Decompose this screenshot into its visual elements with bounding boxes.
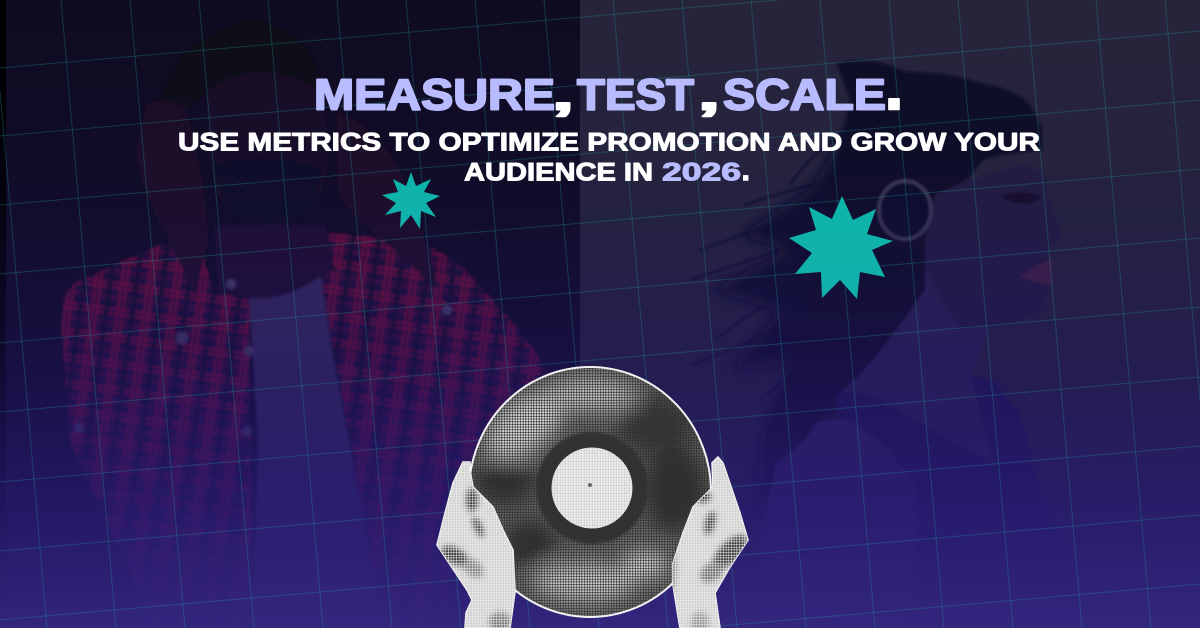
title: Measure, Test, Scale.: , bbox=[698, 70, 720, 120]
man: left hand on headphones bbox=[136, 101, 208, 295]
woman: face bbox=[920, 165, 1062, 330]
illustration: halftone hands holding a vinyl record bbox=[430, 360, 760, 628]
subtitle: metrics and audience growth bbox=[178, 128, 1040, 188]
photo: man wearing headphones and plaid shirt bbox=[61, 20, 552, 628]
woman: dark sleeveless top bbox=[837, 376, 1080, 628]
right hand bbox=[672, 456, 749, 628]
woman: shoulder and arm bbox=[757, 420, 918, 628]
man: face and beard bbox=[205, 72, 330, 224]
title: Measure, Test, Scale.: TEST bbox=[577, 70, 694, 120]
man: shirt buttons bbox=[74, 279, 452, 436]
woman: headphone ring bbox=[879, 181, 931, 239]
subtitle: metrics and audience growth: 2026 bbox=[662, 158, 741, 186]
man: t-shirt bbox=[249, 276, 383, 628]
title: Measure, Test, Scale.: . bbox=[884, 46, 904, 126]
man: backward cap bbox=[161, 20, 320, 110]
man: neck and chest bbox=[214, 225, 335, 299]
title: Measure, Test, Scale.: SCALE bbox=[723, 70, 886, 120]
title: Measure, Test, Scale.: , bbox=[552, 70, 574, 120]
man: right hand on headphones bbox=[337, 112, 440, 290]
woman: dark hair bbox=[765, 60, 1042, 470]
subtitle: metrics and audience growth: AUDIENCE IN bbox=[464, 158, 653, 186]
icon: small teal starburst bbox=[382, 172, 440, 229]
left hand bbox=[436, 461, 516, 628]
woman: wind-blown hair wisps bbox=[690, 110, 880, 400]
title: Measure, Test, Scale.: MEASURE bbox=[314, 70, 555, 120]
subtitle: metrics and audience growth: . bbox=[741, 150, 750, 188]
subtitle: metrics and audience growth: USE METRICS TO OPTIMIZE PROMOTION AND GROW YOUR bbox=[178, 128, 1040, 156]
title: Measure, Test, Scale. bbox=[314, 46, 904, 126]
woman: lips bbox=[1020, 258, 1052, 285]
vinyl centre label bbox=[552, 448, 632, 528]
photo: woman in profile with headphones bbox=[690, 60, 1080, 628]
woman: eye shadow bbox=[1000, 192, 1042, 204]
woman: chest and neck skin bbox=[837, 250, 994, 465]
vinyl disc bbox=[460, 360, 720, 617]
icon: large teal starburst bbox=[789, 196, 893, 299]
woman: hair wash behind the head bbox=[710, 110, 925, 520]
man: plaid shirt bbox=[61, 232, 552, 628]
